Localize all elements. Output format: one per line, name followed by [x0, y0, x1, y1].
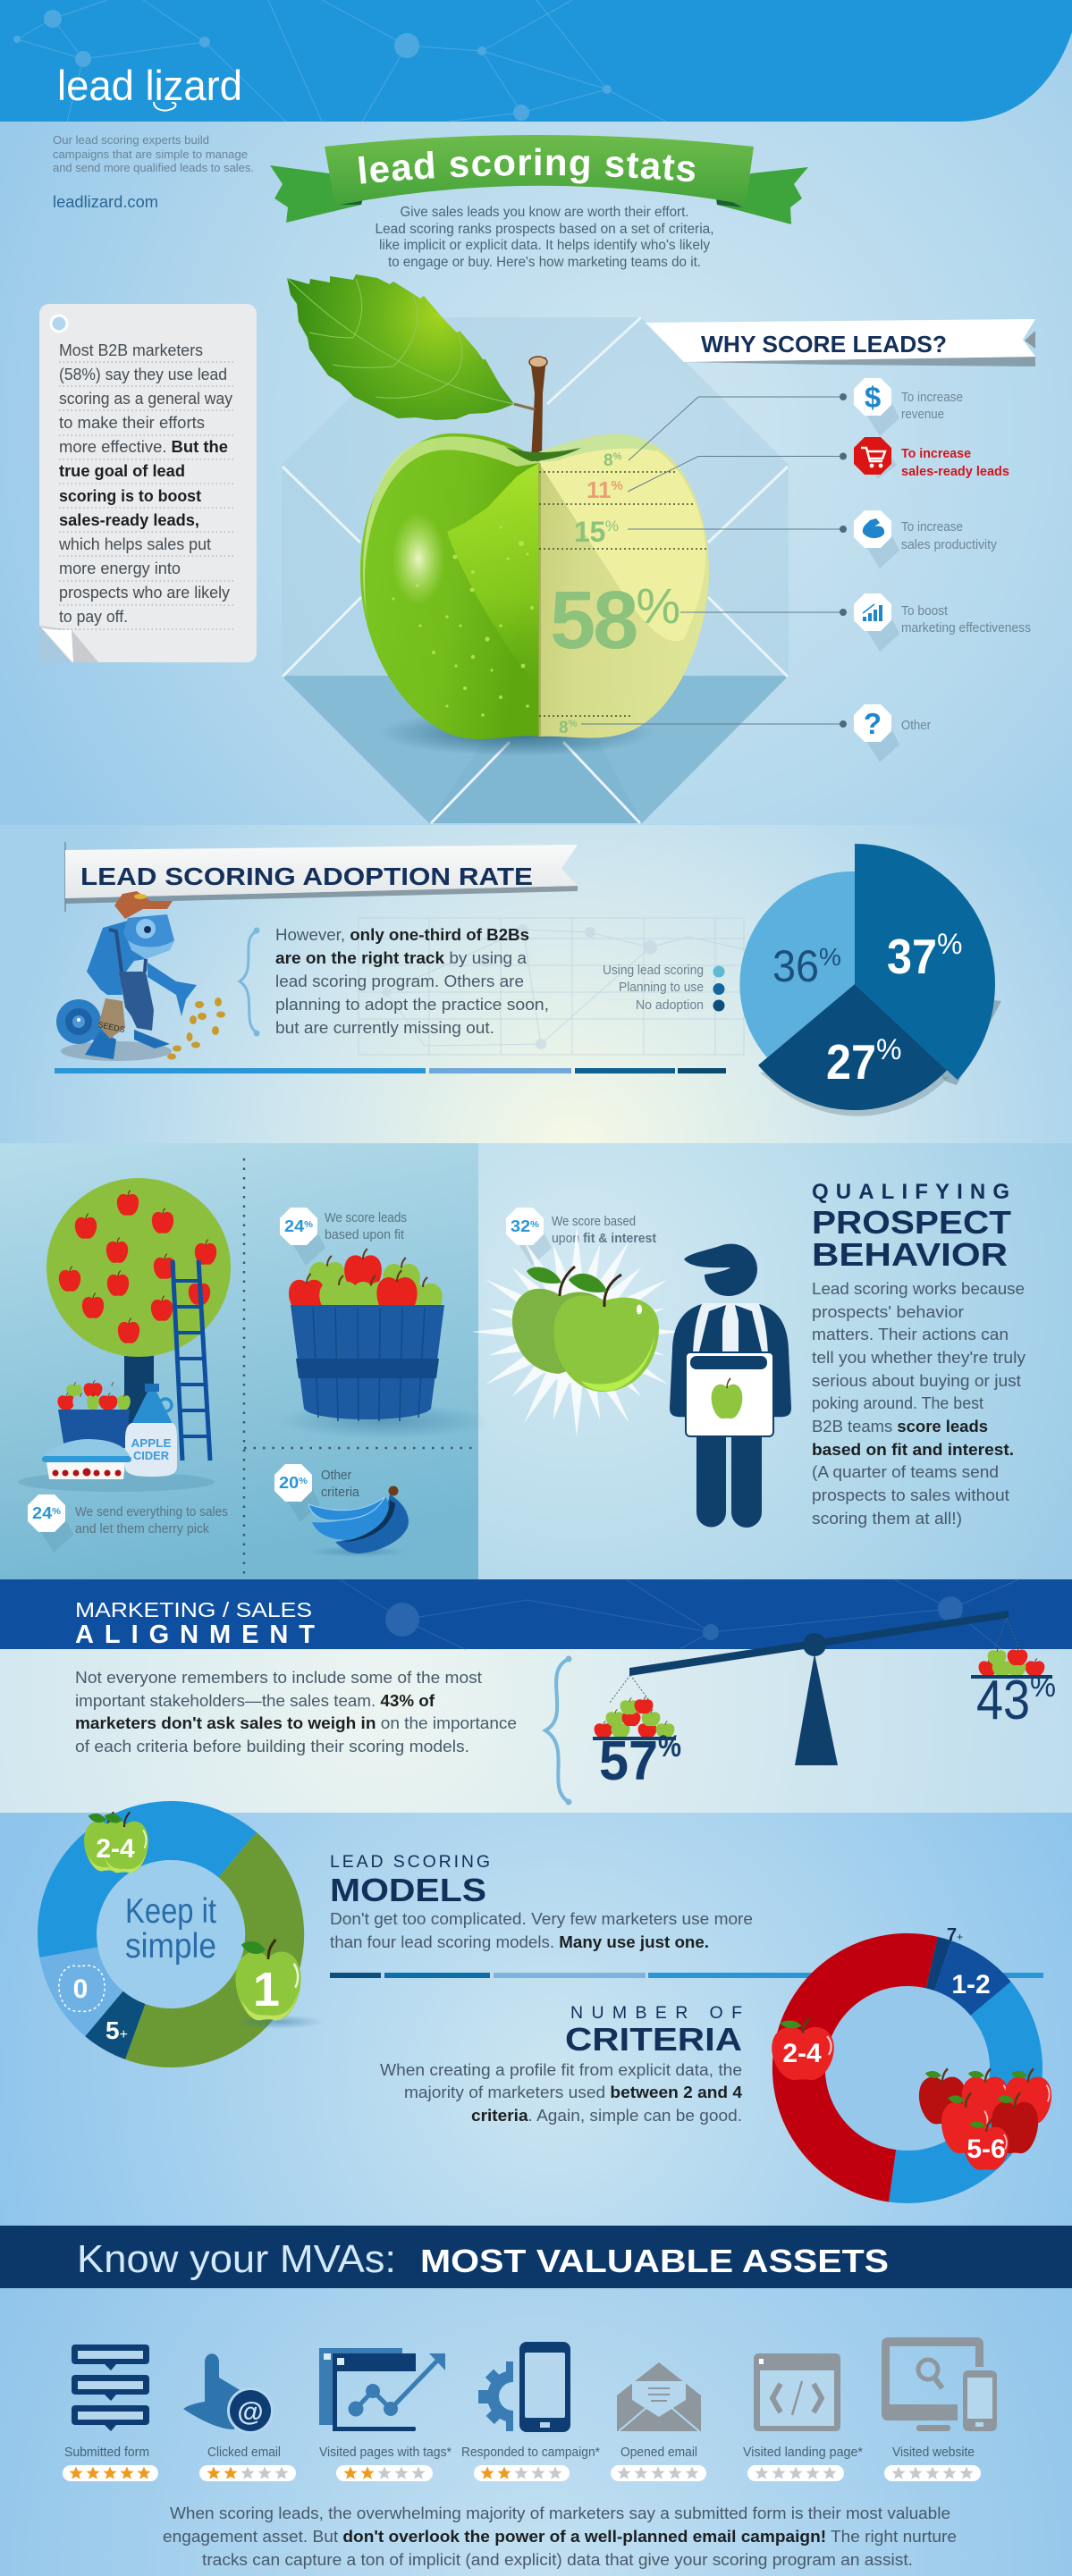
cider jug	[125, 1384, 177, 1477]
title banner	[270, 135, 808, 224]
percentages on apple: 58	[550, 575, 636, 666]
center label: simple	[125, 1927, 216, 1966]
stat: 20% other criteria: 20	[279, 1474, 297, 1492]
item: other: ?	[864, 707, 882, 740]
asset: visited landing page	[743, 2353, 863, 2481]
balance scale: %	[1030, 1670, 1056, 1704]
43 percent: 43	[976, 1670, 1030, 1731]
criteria paragraph: When creating a profile fit from explicit data, the	[380, 2060, 742, 2079]
stat: 20% other criteria: %	[299, 1477, 308, 1486]
label 7+: 7+	[947, 1925, 963, 1945]
adoption paragraph: planning to adopt the practice soon,	[275, 995, 549, 1014]
card text: which helps sales put	[58, 535, 211, 553]
qualifying paragraph: (A quarter of teams send	[812, 1462, 999, 1481]
item: revenue: $	[865, 381, 881, 414]
qualifying paragraph: matters. Their actions can	[812, 1325, 1009, 1343]
intro paragraph: to engage or buy. Here's how marketing teams do it.	[388, 255, 701, 270]
adoption pie chart: 37	[887, 929, 937, 984]
percentages on apple: %	[613, 451, 622, 462]
adoption pie chart: %	[937, 928, 962, 960]
asset: submitted form	[63, 2344, 158, 2481]
models paragraph: Don't get too complicated. Very few marketers use more	[330, 1909, 753, 1928]
asset: visited pages with tags	[319, 2348, 452, 2481]
farmer figure	[670, 1244, 791, 1528]
percentages on apple: 15	[574, 516, 605, 548]
percentages on apple: 8	[559, 719, 569, 737]
alignment band: ALIGNMENT	[75, 1621, 315, 1649]
center label	[125, 1892, 216, 1966]
card text: sales-ready leads,	[59, 511, 199, 529]
legs and feet	[85, 1030, 170, 1059]
stat: 24% send everything: and let them cherry pick	[75, 1521, 209, 1536]
chameleon mascot	[56, 891, 225, 1061]
leader lines	[581, 393, 847, 728]
models paragraph	[330, 1909, 753, 1951]
intro paragraph	[376, 205, 713, 270]
hexagon backdrop	[282, 317, 789, 823]
qualifying paragraph: prospects to sales without	[812, 1486, 1009, 1504]
item: revenue: To increase	[901, 390, 963, 405]
card punch hole	[51, 316, 67, 332]
adoption paragraph: are on the right track by using a	[275, 948, 528, 967]
two green apples	[512, 1267, 659, 1392]
qualifying heading: QUALIFYING	[812, 1180, 1009, 1204]
stat: 32% fit and interest: upon fit & interest	[552, 1231, 656, 1246]
closing paragraph	[163, 2504, 957, 2569]
balance scale	[593, 1611, 1056, 1792]
apple illustration	[287, 274, 709, 756]
criteria paragraph: majority of marketers used between 2 and 4	[404, 2083, 743, 2101]
icon: gear and phone	[478, 2342, 570, 2432]
models heading: LEAD SCORING	[330, 1852, 490, 1872]
logo: lead lizard	[57, 62, 242, 109]
intro blurb: Our lead scoring experts build	[53, 133, 209, 147]
overalls	[119, 972, 154, 1031]
item: marketing effectiveness: To boost	[901, 603, 949, 619]
models heading	[330, 1852, 490, 1908]
alignment brace	[545, 1655, 572, 1806]
closing paragraph: tracks can capture a ton of implicit (and explicit) data that give your scoring program an assist.	[202, 2550, 913, 2569]
card text	[58, 341, 232, 626]
item: revenue	[854, 378, 963, 436]
section background: models and criteria	[0, 1813, 1072, 2226]
adoption pie chart	[739, 844, 1001, 1116]
hat	[114, 891, 173, 919]
pie	[42, 1439, 131, 1479]
card dotted rules	[59, 362, 234, 629]
alignment paragraph: Not everyone remembers to include some of the most	[75, 1668, 482, 1687]
shirt straps	[685, 1303, 776, 1354]
percentages on apple: %	[569, 719, 578, 729]
stat: 24% fit: based upon fit	[325, 1227, 405, 1242]
qualifying paragraph: serious about buying or just	[812, 1371, 1021, 1390]
card text: Most B2B marketers	[59, 341, 203, 359]
asset: visited website: Visited website	[892, 2445, 975, 2460]
torso and arms	[87, 921, 197, 1016]
criteria heading: CRITERIA	[565, 2021, 742, 2058]
adoption pie chart: 27	[826, 1034, 876, 1090]
tail	[56, 999, 109, 1044]
asset: opened email: Opened email	[620, 2445, 697, 2460]
label 0: 0	[73, 1974, 88, 2004]
item: sales-ready leads: sales-ready leads	[901, 464, 1009, 479]
apple left half	[360, 434, 539, 739]
adoption paragraph: but are currently missing out.	[275, 1018, 494, 1037]
item: marketing effectiveness	[854, 593, 1031, 652]
adoption pie chart: %	[819, 943, 841, 971]
qualifying paragraph: scoring them at all!)	[812, 1509, 962, 1528]
section background: qualifying right	[478, 1143, 1072, 1579]
why score leads ribbon: WHY SCORE LEADS?	[701, 331, 947, 358]
alignment paragraph: marketers don't ask sales to weigh in on the importance	[75, 1713, 517, 1732]
head and cap	[684, 1244, 757, 1296]
card text: scoring is to boost	[59, 487, 201, 505]
asset: submitted form: Submitted form	[64, 2445, 149, 2460]
closing paragraph: engagement asset. But don't overlook the power of a well-planned email campaign! The right nurture	[163, 2527, 957, 2546]
qualifying paragraph: prospects' behavior	[812, 1302, 964, 1321]
intro paragraph: like implicit or explicit data. It helps identify who's likely	[379, 238, 710, 253]
seed bag	[98, 998, 125, 1039]
icon: code window	[754, 2353, 840, 2431]
intro paragraph: Lead scoring ranks prospects based on a set of criteria,	[376, 222, 713, 237]
why score leads ribbon	[646, 319, 1035, 366]
percentages on apple: 11	[587, 476, 612, 503]
stat: 24% send everything: 24	[32, 1504, 50, 1522]
chameleon mascot: SEEDS	[97, 1020, 126, 1034]
cider jug: CIDER	[133, 1450, 169, 1462]
section background: intro	[0, 0, 1072, 825]
item: marketing effectiveness: marketing effectiveness	[901, 620, 1031, 636]
apple 1	[234, 1940, 324, 2029]
intro paragraph: Give sales leads you know are worth their effort.	[401, 205, 688, 220]
seeds	[167, 998, 225, 1060]
arms	[670, 1304, 791, 1417]
burst rays	[471, 1226, 682, 1437]
intro blurb: campaigns that are simple to manage	[53, 147, 248, 161]
assets heading band: MOST VALUABLE ASSETS	[420, 2243, 889, 2279]
balance scale: %	[658, 1730, 681, 1764]
asset: responded to campaign	[461, 2342, 600, 2481]
section background: assets	[0, 2288, 1072, 2576]
apple tree	[18, 1178, 231, 1492]
asset: clicked email: @	[237, 2397, 264, 2427]
apple cluster 5-6: 5-6	[966, 2134, 1006, 2164]
qualifying paragraph: based on fit and interest.	[812, 1440, 1014, 1459]
pie legend: Planning to use	[619, 980, 704, 995]
qualifying paragraph: poking around. The best	[812, 1393, 983, 1412]
center label: Keep it	[125, 1892, 216, 1931]
qualifying paragraph: Lead scoring works because	[812, 1279, 1025, 1298]
asset: opened email	[611, 2362, 706, 2481]
adoption heading ribbon	[65, 842, 578, 912]
asset: clicked email: Clicked email	[207, 2445, 281, 2460]
percentages on apple: %	[612, 478, 623, 493]
adoption pie chart: %	[876, 1033, 901, 1065]
header bar	[0, 0, 1072, 122]
models donut chart	[59, 1812, 324, 2044]
card text: more energy into	[59, 560, 181, 577]
head	[123, 914, 174, 959]
trunk	[124, 1350, 154, 1439]
card text: to make their efforts	[59, 414, 205, 432]
asset: visited website	[882, 2337, 997, 2481]
segmented bar	[55, 1068, 726, 1073]
chest	[699, 1305, 762, 1351]
models paragraph: than four lead scoring models. Many use just one.	[330, 1932, 709, 1951]
bananas	[308, 1486, 409, 1557]
alignment paragraph	[75, 1668, 517, 1755]
icon: pointer and at sign	[183, 2353, 241, 2429]
apple dotted bands	[539, 472, 706, 716]
asset: clicked email	[183, 2353, 296, 2481]
assets heading band: Know your MVAs:	[77, 2237, 396, 2281]
adoption heading ribbon: LEAD SCORING ADOPTION RATE	[80, 863, 533, 890]
card text: (58%) say they use lead	[59, 366, 227, 383]
card text: prospects who are likely	[59, 584, 230, 602]
stat: 32% fit and interest: %	[530, 1220, 539, 1230]
left pan	[593, 1618, 1019, 1740]
icon: devices	[882, 2337, 997, 2431]
icon: form	[72, 2344, 149, 2431]
57 percent: 57	[599, 1730, 658, 1792]
label 0	[59, 1966, 105, 2011]
apple cluster 5-6	[919, 2068, 1051, 2170]
qualifying heading: PROSPECT	[812, 1204, 1011, 1241]
icon: pages and trend	[319, 2348, 445, 2431]
item: sales-ready leads: To increase	[901, 446, 971, 461]
crown	[46, 1178, 231, 1357]
stat: 24% send everything	[28, 1494, 228, 1553]
criteria heading	[565, 2003, 742, 2058]
asset: responded to campaign: Responded to campaign*	[461, 2445, 600, 2460]
card text: more effective. But the	[59, 438, 228, 456]
legs	[696, 1435, 762, 1528]
percentages on apple: 8	[604, 451, 613, 470]
asset: visited pages with tags: Visited pages with tags*	[319, 2445, 452, 2460]
adoption paragraph	[275, 925, 549, 1037]
right pan	[971, 1646, 1052, 1679]
stat: 24% fit: We score leads	[325, 1210, 407, 1225]
qualifying heading	[812, 1180, 1011, 1273]
alignment paragraph: important stakeholders—the sales team. 43% of	[75, 1691, 435, 1710]
pie legend	[603, 963, 724, 1013]
adoption paragraph: lead scoring program. Others are	[275, 972, 524, 990]
intro blurb: and send more qualified leads to sales.	[53, 161, 254, 174]
label 1-2: 1-2	[951, 1970, 991, 1999]
alignment band	[0, 1579, 1072, 1649]
apple 1: 1	[253, 1963, 280, 2016]
qualifying paragraph: tell you whether they're truly	[812, 1348, 1026, 1367]
website link: leadlizard.com	[53, 193, 158, 211]
item: sales productivity	[854, 510, 997, 568]
models heading: MODELS	[330, 1872, 486, 1908]
criteria heading: NUMBER OF	[570, 2003, 742, 2023]
stat: 20% other criteria: Other	[321, 1468, 351, 1483]
intro blurb	[53, 133, 254, 174]
item: revenue: revenue	[901, 407, 944, 422]
stat: 32% fit and interest: We score based	[552, 1214, 636, 1229]
stem	[530, 358, 546, 461]
item: sales-ready leads	[854, 437, 1009, 479]
criteria donut chart	[772, 1925, 1051, 2176]
percentages on apple: %	[636, 577, 679, 634]
item: other	[854, 704, 931, 762]
stat: 24% fit: 24	[284, 1217, 302, 1235]
percentages on apple	[550, 451, 679, 737]
apron	[686, 1352, 773, 1436]
apples 2-4: 2-4	[96, 1834, 135, 1864]
stat: 24% send everything: %	[52, 1507, 61, 1517]
asset: visited landing page: Visited landing page*	[743, 2445, 863, 2460]
tree apples	[59, 1191, 216, 1343]
apple 2-4	[772, 2017, 834, 2080]
apple right half	[539, 434, 709, 738]
closing paragraph: When scoring leads, the overwhelming majority of marketers say a submitted form is their most valuable	[170, 2504, 950, 2522]
leaf	[287, 274, 535, 420]
note card	[39, 304, 257, 662]
label 5+: 5+	[106, 2016, 128, 2044]
dotted dividers	[244, 1158, 478, 1578]
item: sales productivity: To increase	[901, 519, 963, 535]
qualifying paragraph	[812, 1279, 1026, 1528]
faint network grid	[359, 918, 744, 1055]
qualifying paragraph: B2B teams score leads	[812, 1417, 988, 1435]
stat: 20% other criteria	[274, 1464, 360, 1522]
adoption pie chart: 36	[772, 941, 819, 991]
item: sales productivity: sales productivity	[901, 537, 997, 552]
stat: 24% send everything: We send everything to sales	[75, 1504, 228, 1520]
section background: adoption	[0, 825, 1072, 1143]
stat: 24% fit: %	[304, 1220, 313, 1230]
card text: true goal of lead	[59, 462, 185, 480]
card text: to pay off.	[59, 608, 128, 626]
brace	[240, 928, 259, 1037]
alignment band: MARKETING / SALES	[75, 1598, 312, 1621]
criteria paragraph	[380, 2060, 743, 2125]
assets heading band	[0, 2226, 1072, 2288]
icon: envelope	[617, 2362, 701, 2431]
criteria paragraph: criteria. Again, simple can be good.	[471, 2106, 742, 2125]
percentages on apple: %	[605, 518, 619, 535]
card text: scoring as a general way	[59, 390, 232, 408]
item: other: Other	[901, 718, 931, 733]
title banner: lead scoring stats	[359, 148, 696, 184]
apples 2-4	[84, 1812, 148, 1873]
stat: 32% fit and interest: 32	[511, 1217, 528, 1235]
pie legend: No adoption	[636, 998, 704, 1013]
section background: alignment	[0, 1649, 1072, 1813]
stat: 24% fit	[280, 1208, 407, 1266]
stat: 32% fit and interest	[506, 1208, 656, 1266]
divider bar	[330, 1973, 1043, 1978]
section background: qualifying left	[0, 1143, 478, 1579]
alignment paragraph: of each criteria before building their scoring models.	[75, 1737, 469, 1755]
small basket	[57, 1380, 131, 1448]
qualifying heading: BEHAVIOR	[812, 1236, 1008, 1273]
big basket	[277, 1249, 492, 1439]
ladder	[173, 1260, 210, 1461]
cider jug: APPLE	[131, 1437, 172, 1450]
adoption paragraph: However, only one-third of B2Bs	[275, 925, 529, 944]
apple 2-4: 2-4	[782, 2039, 822, 2068]
stat: 20% other criteria: criteria	[321, 1485, 360, 1500]
pie legend: Using lead scoring	[603, 963, 704, 978]
